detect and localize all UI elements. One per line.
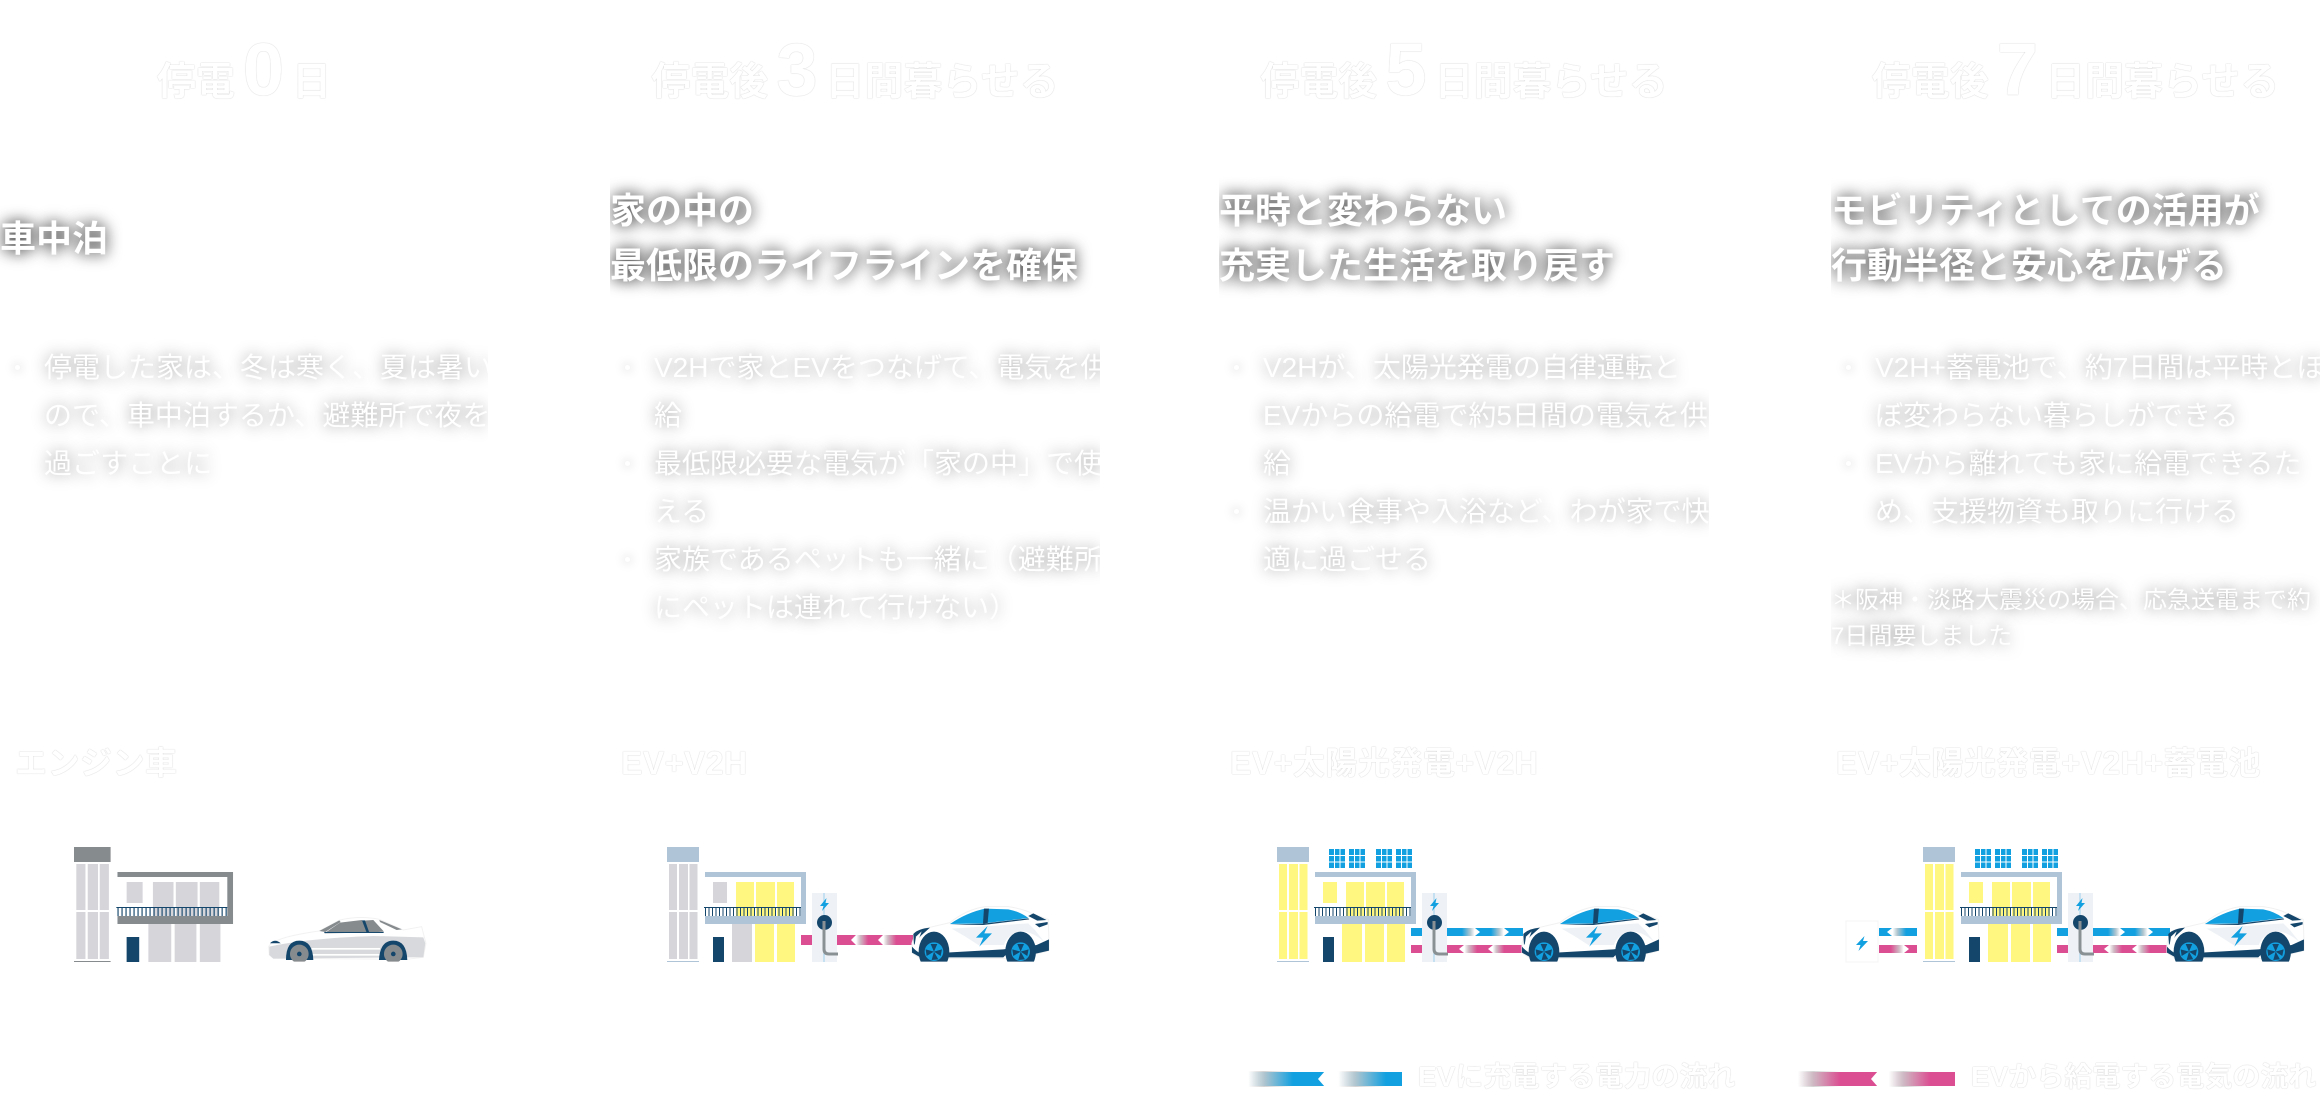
heading: 3 days: 最低限のライフラインを確保 (610, 245, 1078, 286)
supply flow bar (801, 935, 913, 945)
house with partial power (667, 847, 806, 962)
bullet list: 3 days (624, 347, 1100, 626)
house without power (74, 847, 233, 962)
electric car (1522, 907, 1659, 972)
heading: 3 days: 家の中の (610, 190, 754, 231)
V2H charger (1422, 893, 1448, 962)
bullet list: 7 days (1845, 347, 2320, 530)
footnote (1831, 580, 2316, 653)
heading: 5 days (1219, 182, 1620, 293)
bullet list: 7 days: V2H+蓄電池で、約7日間は平時とほ (1875, 352, 2320, 383)
heading: 5 days: 平時と変わらない (1219, 190, 1507, 231)
bullet list: 5 days (1233, 347, 1709, 578)
subheading: EV + solar + V2H + battery: EV+太陽光発電+V2H+蓄電池 (1836, 745, 2261, 781)
subheading: engine car: エンジン車 (15, 745, 178, 781)
panel: 5 days (1219, 28, 1709, 962)
solar powered house (1277, 847, 1416, 962)
bullet list: 7 days: め、支援物資も取りに行ける (1875, 496, 2239, 527)
heading: 7 days: 行動半径と安心を広げる (1831, 245, 2227, 286)
electric car (912, 907, 1049, 972)
heading: 7 days: モビリティとしての活用が (1831, 190, 2260, 231)
battery flow bars (1879, 928, 1917, 953)
bullet list: 3 days: にペットは連れて行けない） (654, 592, 1017, 623)
V2H charger (2068, 893, 2094, 962)
legend label: supply: EVから給電する電気の流れ (1971, 1061, 2316, 1092)
bullet list: 5 days: 適に過ごせる (1263, 544, 1431, 575)
heading: 7 days (1831, 182, 2268, 292)
bullet list: 3 days: 家族であるペットも一緒に（避難所 (654, 544, 1100, 575)
illustration: house, V2H and EV (667, 847, 1050, 962)
footnote: ＊阪神・淡路大震災の場合、応急送電まで約 (1831, 587, 2311, 614)
engine car (269, 917, 426, 963)
bullet list: 3 days: 最低限必要な電気が「家の中」で使 (654, 448, 1100, 479)
legend bars (1250, 1071, 1955, 1087)
charge and supply flow bars (1411, 928, 1523, 953)
illustration: house and engine car (74, 847, 426, 962)
bullet list: 5 days: EVからの給電で約5日間の電気を供 (1263, 400, 1708, 431)
bullet list: 5 days: 給 (1263, 448, 1291, 479)
bullet list: 3 days: える (654, 496, 709, 527)
bullet list: day 0: ので、車中泊するか、避難所で夜を (44, 400, 488, 431)
bullet list: day 0: 過ごすことに (44, 448, 212, 479)
legend label: charging: EVに充電する電力の流れ (1418, 1061, 1735, 1092)
title: 3 days: 停電後3日間暮らせる (651, 28, 1059, 111)
title: day 0: 停電0日 (157, 28, 331, 111)
heading: 3 days (610, 182, 1087, 293)
panel: day 0 (0, 28, 488, 962)
bullet list: day 0: 停電した家は、冬は寒く、夏は暑い (44, 352, 488, 383)
solar powered house (1923, 847, 2062, 962)
heading: day 0: 車中泊 (0, 218, 108, 259)
charge and supply flow bars (2057, 928, 2170, 953)
title: 7 days: 停電後7日間暮らせる (1872, 28, 2279, 111)
bullet list: 3 days: V2Hで家とEVをつなげて、電気を供 (654, 352, 1100, 383)
V2H charger (812, 893, 838, 962)
subheading: EV + V2H: EV+V2H (621, 745, 748, 781)
heading: 5 days: 充実した生活を取り戻す (1219, 245, 1615, 286)
bullet list: 5 days: V2Hが、太陽光発電の自律運転と (1263, 352, 1681, 383)
bullet list: 5 days: 温かい食事や入浴など、わが家で快 (1263, 496, 1709, 527)
bullet list: day 0 (14, 347, 488, 482)
electric car (2167, 907, 2304, 972)
subheading: EV + solar + V2H: EV+太陽光発電+V2H (1230, 745, 1538, 781)
bullet list: 7 days: ぼ変わらない暮らしができる (1875, 400, 2238, 431)
title: 5 days: 停電後5日間暮らせる (1260, 28, 1668, 111)
legend (1250, 1061, 2316, 1092)
panel: 7 days (1831, 28, 2320, 962)
home battery (1846, 921, 1878, 962)
illustration: battery, solar house, V2H and EV (1846, 847, 2304, 962)
illustration: solar house, V2H and EV (1277, 847, 1660, 962)
panel: 3 days (610, 28, 1100, 962)
bullet list: 7 days: EVから離れても家に給電できるた (1875, 448, 2302, 479)
bullet list: 3 days: 給 (654, 400, 682, 431)
footnote: 7日間要しました (1831, 623, 2012, 650)
